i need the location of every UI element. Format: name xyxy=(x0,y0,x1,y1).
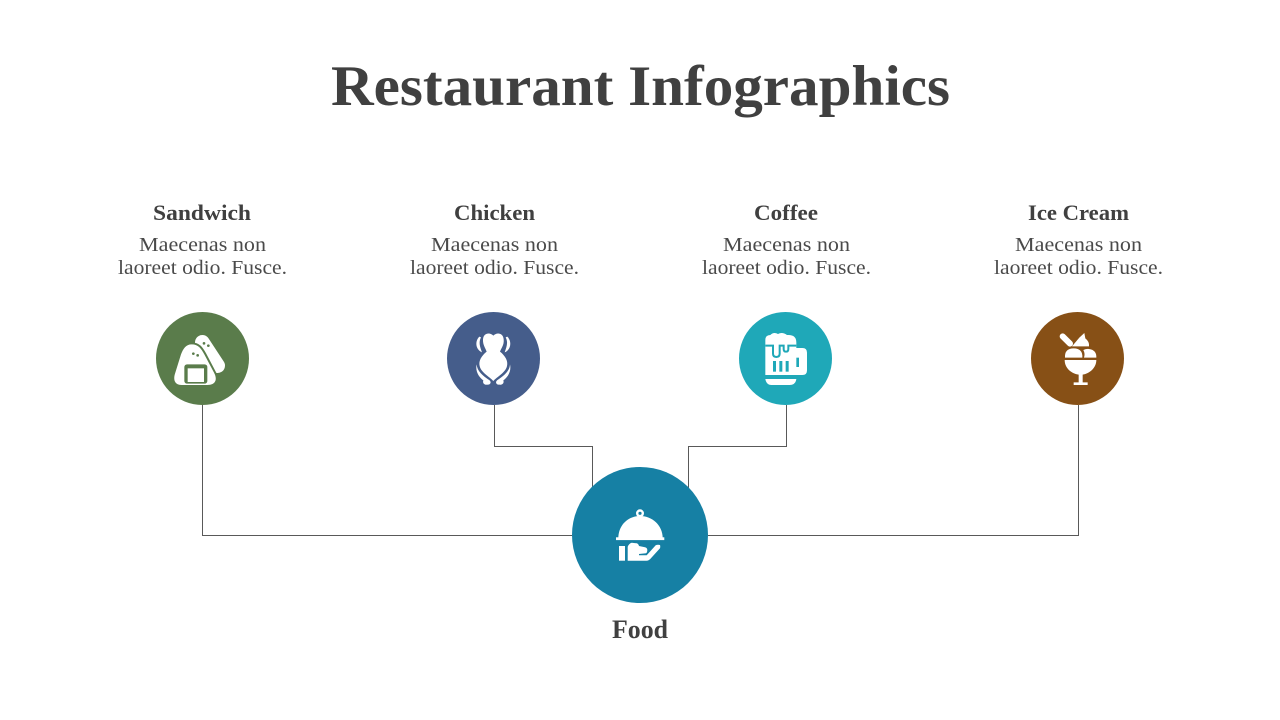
text block: coffee: Coffee xyxy=(754,200,818,225)
text block: chicken: Chicken xyxy=(454,200,535,225)
icon: food tray xyxy=(616,510,664,561)
connector: ice cream to food xyxy=(708,405,1078,536)
text block: sandwich: Maecenas non xyxy=(139,234,266,256)
text block: sandwich xyxy=(118,200,287,279)
connector: chicken to food xyxy=(494,405,592,488)
text block: chicken: Maecenas non xyxy=(431,234,558,256)
label: food: Food xyxy=(612,615,669,644)
icon: ice cream xyxy=(1063,333,1096,385)
connector: coffee to food xyxy=(688,405,786,488)
icon: sandwich xyxy=(174,342,218,385)
icon: coffee xyxy=(765,333,807,385)
text block: coffee: laoreet odio. Fusce. xyxy=(702,257,871,279)
circle: sandwich xyxy=(156,312,249,405)
text block: coffee xyxy=(702,200,871,279)
connector: sandwich to food xyxy=(202,405,572,536)
text block: chicken: laoreet odio. Fusce. xyxy=(410,257,579,279)
circle: ice cream xyxy=(1031,312,1124,405)
text block: sandwich: laoreet odio. Fusce. xyxy=(118,257,287,279)
text block: ice cream: laoreet odio. Fusce. xyxy=(994,257,1163,279)
circle: coffee xyxy=(739,312,832,405)
icon: chicken xyxy=(476,334,510,385)
text block: ice cream xyxy=(994,200,1163,279)
text block: ice cream: Maecenas non xyxy=(1015,234,1142,256)
text block: chicken xyxy=(410,200,579,279)
text block: ice cream: Ice Cream xyxy=(1028,200,1129,225)
title: Restaurant Infographics xyxy=(331,55,950,118)
text block: coffee: Maecenas non xyxy=(723,234,850,256)
circle: food xyxy=(572,467,708,603)
circle: chicken xyxy=(447,312,540,405)
text block: sandwich: Sandwich xyxy=(153,200,251,225)
